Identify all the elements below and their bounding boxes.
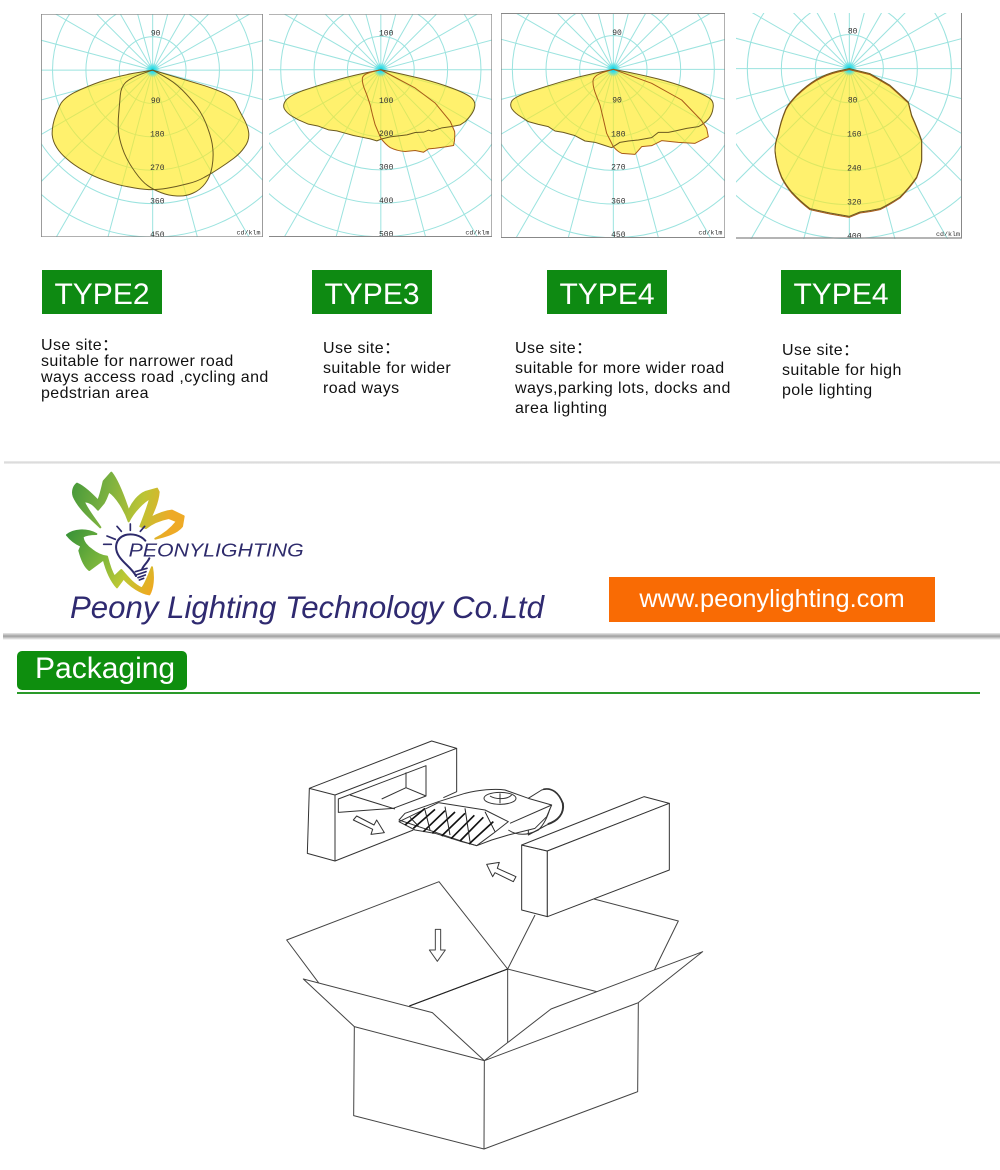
logo upper petals — [73, 473, 184, 539]
chart: TYPE3 polar light distribution: 100 — [379, 29, 394, 38]
chart: TYPE4 polar light distribution (round): 320 — [847, 198, 862, 207]
text: TYPE3 use site: Use site： — [323, 340, 400, 357]
heading: Packaging — [17, 651, 187, 690]
text: TYPE2 use site — [41, 337, 269, 402]
text: TYPE2 use site: pedstrian area — [41, 385, 149, 402]
heading: Packaging: Packaging — [35, 652, 175, 685]
chart: TYPE3 polar light distribution: 200 — [379, 130, 394, 139]
chart: TYPE2 polar light distribution: 180 — [150, 131, 165, 140]
text: TYPE4 use site wide: suitable for more wider road — [515, 360, 725, 377]
logo: peony flower with bulb: PEONYLIGHTING — [129, 540, 304, 561]
chart: TYPE4 polar light distribution (round) — [736, 13, 962, 239]
badge: TYPE2 — [42, 270, 162, 314]
text: TYPE4 use site high pole — [782, 342, 902, 399]
chart: TYPE4 polar light distribution (round): 240 — [847, 164, 862, 173]
logo light bulb — [104, 524, 149, 580]
logo lower petals — [67, 530, 153, 594]
logo: peony flower with bulb — [66, 472, 304, 596]
lamp fixture — [399, 789, 564, 846]
chart: TYPE2 polar light distribution — [41, 14, 263, 237]
right foam block — [522, 797, 669, 917]
chart: TYPE4 polar light distribution (round): cd/klm — [936, 230, 960, 238]
foam blocks and lamp — [306, 740, 670, 918]
chart: TYPE4 polar light distribution (wide): 360 — [611, 198, 626, 207]
chart: TYPE2 polar light distribution: 90 — [151, 30, 161, 39]
heading rule — [17, 692, 980, 694]
chart: TYPE4 polar light distribution (round): 80 — [848, 96, 858, 105]
open carton box — [286, 881, 704, 1150]
text: TYPE2 use site: ways access road ,cycling and — [41, 369, 269, 386]
chart: TYPE3 polar light distribution — [269, 14, 492, 237]
chart: TYPE2 polar light distribution: 270 — [150, 164, 165, 173]
text: TYPE4 use site wide: area lighting — [515, 400, 607, 417]
text: TYPE4 use site wide: ways,parking lots, docks and — [515, 380, 731, 397]
band: banner top edge — [4, 461, 1000, 464]
chart: TYPE3 polar light distribution: 400 — [379, 197, 394, 206]
chart: TYPE4 polar light distribution (wide) — [501, 13, 725, 238]
badge: TYPE4 high pole: TYPE4 — [793, 278, 889, 311]
text: TYPE3 use site — [323, 340, 451, 397]
text: TYPE2 use site: suitable for narrower road — [41, 353, 234, 370]
text: TYPE3 use site: road ways — [323, 380, 400, 397]
illustration: packaging diagram — [286, 740, 704, 1150]
badge: TYPE3: TYPE3 — [324, 278, 420, 311]
text: TYPE3 use site: suitable for wider — [323, 360, 451, 377]
website button — [609, 577, 935, 622]
chart: TYPE4 polar light distribution (wide): 90 — [612, 97, 622, 106]
chart: TYPE4 polar light distribution (round): 80 — [848, 28, 858, 37]
chart: TYPE4 polar light distribution (wide): 270 — [611, 164, 626, 173]
text: TYPE2 use site: Use site： — [41, 337, 118, 354]
left foam block — [307, 741, 457, 861]
text: TYPE4 use site high pole: Use site： — [782, 342, 859, 359]
chart: TYPE3 polar light distribution: 100 — [379, 97, 394, 106]
chart: TYPE3 polar light distribution: 300 — [379, 164, 394, 173]
badge: TYPE2: TYPE2 — [54, 278, 150, 311]
chart: TYPE2 polar light distribution: 90 — [151, 97, 161, 106]
chart: TYPE2 polar light distribution: 360 — [150, 197, 165, 206]
chart: TYPE4 polar light distribution (round): 160 — [847, 130, 862, 139]
chart: TYPE4 polar light distribution (wide): 180 — [611, 130, 626, 139]
badge: TYPE4 wide: TYPE4 — [559, 278, 655, 311]
text: TYPE4 use site wide — [515, 340, 731, 417]
text: TYPE4 use site wide: Use site： — [515, 340, 592, 357]
heading: company name: Peony Lighting Technology Co.Ltd — [70, 590, 544, 625]
badge: TYPE3 — [312, 270, 432, 314]
website button: www.peonylighting.com — [639, 585, 905, 613]
arrow left — [487, 862, 516, 882]
badge: TYPE4 wide — [547, 270, 667, 314]
badge: TYPE4 high pole — [781, 270, 901, 314]
chart: TYPE4 polar light distribution (wide): cd/klm — [698, 229, 722, 237]
text: TYPE4 use site high pole: pole lighting — [782, 382, 873, 399]
band: banner bottom shadow — [3, 633, 1000, 640]
chart: TYPE4 polar light distribution (wide): 90 — [612, 29, 622, 38]
text: TYPE4 use site high pole: suitable for high — [782, 362, 902, 379]
arrow right — [353, 816, 384, 834]
